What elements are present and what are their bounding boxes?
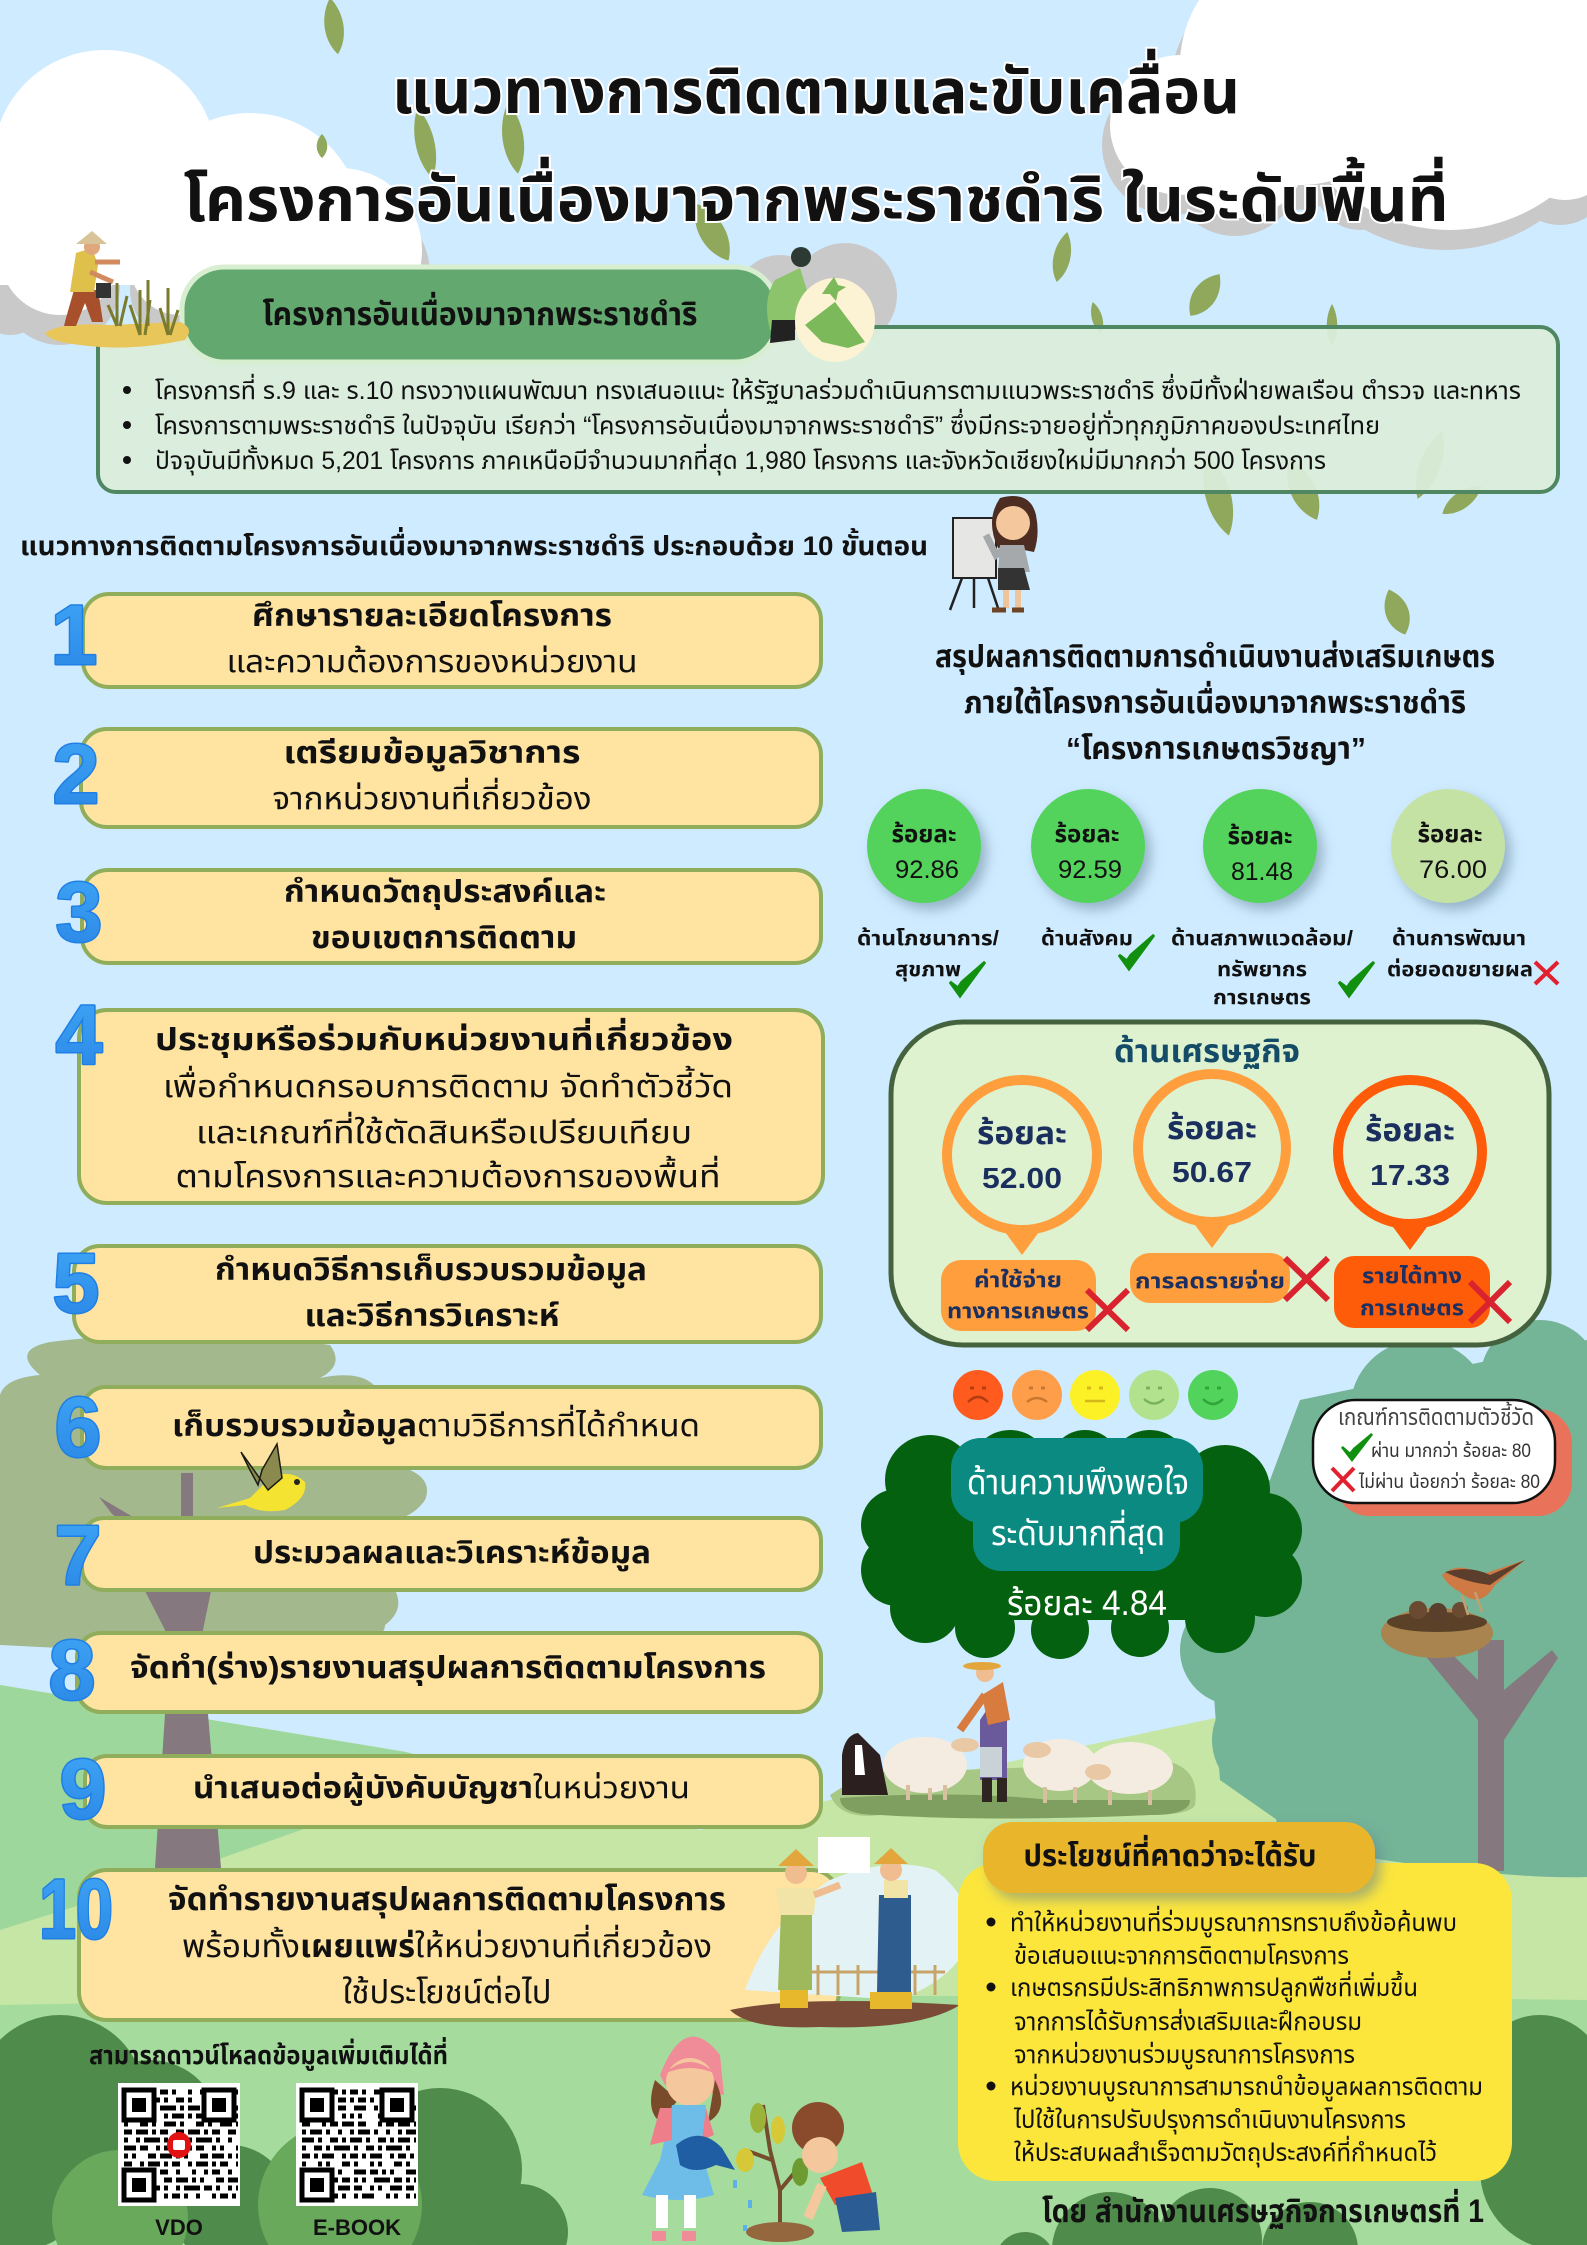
stat: nutrition and health: ด้านโภชนาการ/ [857, 928, 1000, 950]
leaves [317, 0, 1486, 639]
panel: economic: ด้านเศรษฐกิจ [1114, 1033, 1300, 1069]
step 10: ให้หน่วยงานที่เกี่ยวข้อง [415, 1924, 712, 1964]
step 8: 8 [49, 1623, 95, 1717]
icon: presenter with flipchart [950, 496, 1038, 610]
summary heading: ภายใต้โครงการอันเนื่องมาจากพระราชดำริ [964, 680, 1466, 720]
economic gauge 3: รายได้ทาง [1362, 1265, 1462, 1288]
economic gauge 3: การเกษตร [1360, 1297, 1464, 1320]
step 6: 6 [55, 1380, 101, 1474]
step 5: กำหนดวิธีการเก็บรวบรวมข้อมูล [215, 1252, 647, 1288]
benefits list: หน่วยงานบูรณาการสามารถนำข้อมูลผลการติดตาม [1010, 2073, 1483, 2102]
step 10: เผยแพร่ [300, 1928, 415, 1964]
bullet list: โครงการที่ ร.9 และ ร.10 ทรงวางแผนพัฒนา ทรงเสนอแนะ ให้รัฐบาลร่วมดำเนินการตามแนวพระราชดำริ ซึ่งมีทั้งฝ่ายพลเรือน ตำรวจ และทหาร [155, 373, 1521, 405]
step 4: เพื่อกำหนดกรอบการติดตาม จัดทำตัวชี้วัด [163, 1065, 733, 1104]
step 2: 2 [53, 727, 99, 821]
QR code: VDO [118, 2083, 240, 2206]
summary heading [935, 639, 1495, 766]
satisfaction cloud: ร้อยละ 4.84 [1007, 1584, 1167, 1623]
bottom bushes [0, 2015, 1587, 2245]
stat: social: ด้านสังคม [1041, 928, 1133, 950]
download heading: สามารถดาวน์โหลดข้อมูลเพิ่มเติมได้ที่ [89, 2037, 448, 2071]
stat: environment: ด้านสภาพแวดล้อม/ [1171, 928, 1354, 950]
benefits list: จากการได้รับการส่งเสริมและฝึกอบรม [1014, 2008, 1362, 2036]
step 8: จัดทำ(ร่าง)รายงานสรุปผลการติดตามโครงการ [130, 1650, 766, 1686]
step 7: 7 [55, 1508, 101, 1602]
title line 2: โครงการอันเนื่องมาจากพระราชดำริ ในระดับพื้นที่ [184, 156, 1449, 235]
heading pill: royal projects: โครงการอันเนื่องมาจากพระราชดำริ [262, 291, 698, 332]
step 9: ในหน่วยงาน [533, 1772, 690, 1805]
step 5: และวิธีการวิเคราะห์ [304, 1298, 560, 1333]
QR labels: E-BOOK [313, 2215, 401, 2240]
economic gauge 2: ร้อยละ [1167, 1110, 1257, 1146]
icon: person holding map [767, 247, 875, 362]
bullet list: ปัจจุบันมีทั้งหมด 5,201 โครงการ ภาคเหนือมีจำนวนมากที่สุด 1,980 โครงการ และจังหวัดเชียงใหม่มีมากกว่า 500 โครงการ [155, 443, 1326, 476]
step 1: 1 [51, 588, 97, 682]
bullet list [123, 373, 1521, 476]
step 9: 9 [60, 1742, 106, 1836]
stat: social: ร้อยละ [1054, 820, 1120, 848]
summary heading: “โครงการเกษตรวิชญา” [1066, 731, 1366, 766]
title line 1: แนวทางการติดตามและขับเคลื่อน [392, 48, 1240, 127]
panel: economic [891, 1022, 1549, 1345]
icon: yellow bird [217, 1444, 305, 1511]
step 2: เตรียมข้อมูลวิชาการ [284, 735, 580, 771]
icon: shepherd with sheep [830, 1662, 1196, 1818]
heading pill: royal projects [182, 267, 777, 362]
step 10: 10 [39, 1862, 113, 1956]
QR labels: VDO [155, 2215, 203, 2240]
QR code: E-BOOK [296, 2083, 418, 2206]
title [184, 48, 1449, 235]
step 1: และความต้องการของหน่วยงาน [226, 644, 638, 679]
legend: criteria: ไม่ผ่าน น้อยกว่า ร้อยละ 80 [1358, 1470, 1540, 1493]
icon: children planting a tree [642, 2037, 880, 2242]
step 2: จากหน่วยงานที่เกี่ยวข้อง [272, 777, 592, 816]
legend: criteria: เกณฑ์การติดตามตัวชี้วัด [1338, 1401, 1534, 1430]
economic gauge 3: ร้อยละ [1365, 1112, 1455, 1148]
stat: environment [1171, 789, 1374, 1009]
step 1: ศึกษารายละเอียดโครงการ [252, 598, 612, 633]
stat: nutrition and health: สุขภาพ [895, 959, 961, 981]
benefits heading pill: ประโยชน์ที่คาดว่าจะได้รับ [1024, 1834, 1316, 1873]
satisfaction faces [953, 1370, 1238, 1420]
step 10 [39, 1862, 839, 2020]
step 4: และเกณฑ์ที่ใช้ตัดสินหรือเปรียบเทียบ [196, 1111, 692, 1150]
benefits list: ไปใช้ในการปรับปรุงการดำเนินงานโครงการ [1013, 2106, 1406, 2135]
stat: development: ร้อยละ [1418, 820, 1482, 848]
benefits heading pill [983, 1822, 1375, 1893]
step 1 [51, 588, 821, 687]
economic gauge 1: ค่าใช้จ่าย [974, 1269, 1062, 1292]
satisfaction cloud: ด้านความพึงพอใจ [967, 1463, 1189, 1502]
right tree [1180, 1320, 1587, 1877]
benefits list: ให้ประสบผลสำเร็จตามวัตถุประสงค์ที่กำหนดไว้ [1014, 2135, 1437, 2168]
left tree [0, 1334, 427, 1868]
QR labels [155, 2215, 401, 2240]
step 7 [55, 1508, 821, 1602]
economic gauge 3: 17.33 [1370, 1160, 1450, 1192]
bullet list: โครงการตามพระราชดำริ ในปัจจุบัน เรียกว่า “โครงการอันเนื่องมาจากพระราชดำริ” ซึ่งมีกระจายอยู่ทั่วทุกภูมิภาคของประเทศไทย [155, 408, 1380, 441]
benefits list: เกษตรกรมีประสิทธิภาพการปลูกพืชที่เพิ่มขึ้น [1010, 1970, 1418, 2003]
economic gauge 2: การลดรายจ่าย [1135, 1270, 1285, 1293]
stat: environment: ร้อยละ [1228, 822, 1292, 850]
economic gauge 2: 50.67 [1172, 1157, 1252, 1189]
economic gauge 1: ทางการเกษตร [947, 1300, 1089, 1323]
satisfaction cloud [861, 1430, 1302, 1659]
ground hills [0, 1685, 1587, 2245]
step 7: ประมวลผลและวิเคราะห์ข้อมูล [253, 1535, 651, 1571]
icon: farmers with tablet [730, 1837, 969, 2027]
legend: criteria [1313, 1400, 1572, 1516]
icon: rice farmer [45, 231, 189, 348]
step 6: ตามวิธีการที่ได้กำหนด [417, 1404, 700, 1443]
step 3: ขอบเขตการติดตาม [311, 920, 577, 955]
step 10: พร้อมทั้ง [182, 1926, 300, 1964]
step 9: นำเสนอต่อผู้บังคับบัญชา [193, 1772, 533, 1806]
step 3: 3 [56, 865, 102, 959]
economic gauge 3 [1334, 1080, 1510, 1328]
step 4: ประชุมหรือร่วมกับหน่วยงานที่เกี่ยวข้อง [155, 1017, 733, 1058]
stat: development [1387, 789, 1558, 984]
economic gauge 1 [941, 1080, 1128, 1331]
stat: nutrition and health [857, 789, 1000, 996]
step 10: ใช้ประโยชน์ต่อไป [342, 1974, 552, 2010]
legend: criteria: ผ่าน มากกว่า ร้อยละ 80 [1371, 1439, 1531, 1462]
step 6 [55, 1380, 821, 1474]
stat: social [1031, 789, 1154, 969]
step 9 [60, 1742, 821, 1836]
step 8 [49, 1623, 821, 1717]
step 4: 4 [56, 988, 103, 1082]
panel: expected benefits [958, 1822, 1512, 2181]
summary heading: สรุปผลการติดตามการดำเนินงานส่งเสริมเกษตร [935, 639, 1495, 675]
footer credit: โดย สำนักงานเศรษฐกิจการเกษตรที่ 1 [1042, 2188, 1484, 2229]
benefits list: ทำให้หน่วยงานที่ร่วมบูรณาการทราบถึงข้อค้นพบ [1010, 1905, 1457, 1938]
stat: social: 92.59 [1058, 856, 1122, 884]
clouds [0, 0, 1587, 355]
economic gauge 1: 52.00 [982, 1163, 1062, 1195]
step 5: 5 [53, 1236, 99, 1330]
step 3 [56, 865, 821, 963]
benefits list: ข้อเสนอแนะจากการติดตามโครงการ [1014, 1942, 1349, 1970]
benefits list: จากหน่วยงานร่วมบูรณาการโครงการ [1014, 2041, 1355, 2070]
step 3: กำหนดวัตถุประสงค์และ [284, 874, 606, 910]
step 2 [53, 727, 821, 827]
stat: nutrition and health: 92.86 [895, 856, 959, 884]
stat: development: ด้านการพัฒนา [1392, 928, 1526, 950]
economic gauge 1: ร้อยละ [977, 1115, 1067, 1151]
stat: development: 76.00 [1419, 856, 1487, 884]
step 4: ตามโครงการและความต้องการของพื้นที่ [176, 1155, 720, 1194]
icon: bird nest [1381, 1560, 1525, 1658]
subheading: ten steps: แนวทางการติดตามโครงการอันเนื่องมาจากพระราชดำริ ประกอบด้วย 10 ขั้นตอน [20, 527, 928, 561]
benefits list [986, 1905, 1483, 2168]
stat: nutrition and health: ร้อยละ [892, 820, 956, 848]
panel: royal projects intro [98, 327, 1558, 492]
step 5 [53, 1236, 821, 1342]
stat: environment: ทรัพยากร [1217, 959, 1307, 981]
satisfaction cloud: ระดับมากที่สุด [991, 1509, 1165, 1554]
step 10: จัดทำรายงานสรุปผลการติดตามโครงการ [168, 1881, 726, 1918]
stat: environment: 81.48 [1231, 858, 1293, 886]
step 4 [56, 988, 823, 1203]
step 6: เก็บรวบรวมข้อมูล [172, 1408, 417, 1444]
economic gauge 2 [1130, 1074, 1328, 1303]
stat: development: ต่อยอดขยายผล [1387, 959, 1533, 981]
stat: environment: การเกษตร [1213, 987, 1311, 1009]
